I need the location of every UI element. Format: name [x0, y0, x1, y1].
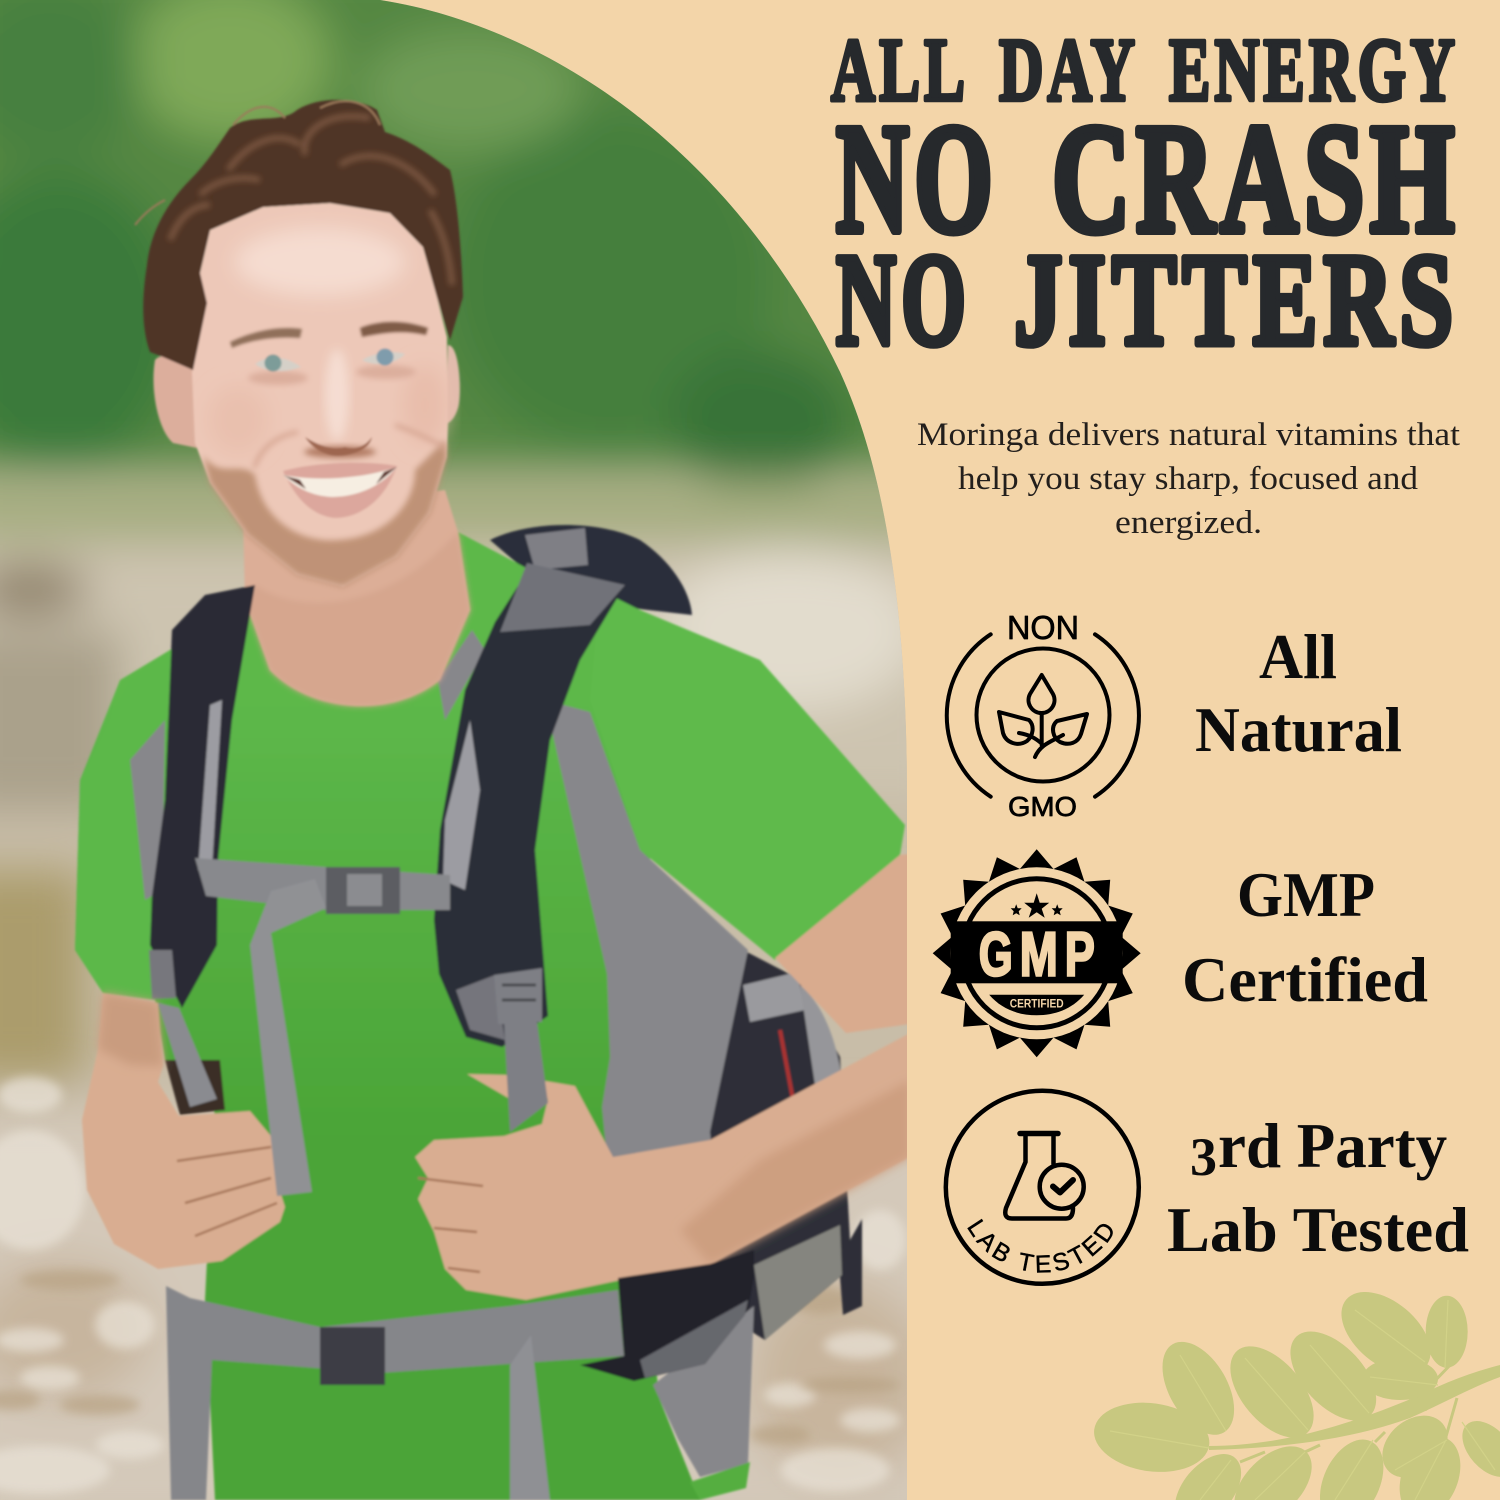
label: all natural: Natural [1195, 695, 1402, 765]
moringa leaf branch [1090, 1276, 1500, 1500]
label: all natural: All [1259, 622, 1337, 692]
right forearm and hand [415, 1033, 910, 1300]
icon: gmp certified: G [979, 920, 1013, 989]
stubble [203, 440, 447, 587]
title line 2 [836, 92, 1460, 265]
label: third party lab tested: rd Party [1218, 1111, 1447, 1181]
label: third party lab tested: 3 [1190, 1127, 1217, 1187]
title line 2: NO [836, 92, 998, 265]
face [192, 203, 448, 587]
title line 1: DAY [999, 21, 1139, 120]
shirt torso [75, 532, 700, 1500]
title line 1 [831, 21, 1459, 120]
label: third party lab tested: Lab Tested [1167, 1195, 1469, 1265]
eye sockets [248, 371, 308, 385]
icon: non gmo [947, 609, 1139, 822]
shirt grey side panels [130, 630, 754, 1477]
title line 3 [836, 226, 1459, 373]
blurred forest and river backdrop [0, 0, 950, 1500]
right upper arm [775, 854, 910, 1033]
icon: lab tested [944, 1088, 1142, 1286]
shirt hem [690, 1462, 750, 1500]
head [135, 100, 463, 587]
label: third party lab tested [1167, 1111, 1469, 1265]
left lower strap [158, 1003, 217, 1107]
neck [243, 490, 470, 706]
chest strap with buckle [195, 858, 450, 1196]
photo: hiker with backpack [0, 0, 950, 1500]
icon: non gmo: GMO [1008, 791, 1077, 822]
left arm and hand [82, 993, 285, 1269]
hair [143, 100, 463, 370]
right shoulder strap [434, 563, 625, 1047]
left shoulder strap [149, 585, 255, 1008]
label: gmp certified: Certified [1182, 945, 1428, 1015]
description text: energized. [1115, 505, 1262, 541]
hip belt [166, 1250, 754, 1500]
backpack top and side pocket [490, 525, 862, 1340]
mouth [283, 463, 397, 518]
label: gmp certified [1182, 860, 1428, 1015]
icon: gmp certified [933, 849, 1141, 1057]
title line 3: NO [836, 226, 971, 373]
right lower strap and buckle [494, 968, 548, 1132]
description text [917, 417, 1460, 541]
nostrils [305, 437, 372, 456]
icon: gmp certified: M [1020, 920, 1058, 989]
ear [154, 356, 197, 448]
icon: non gmo: NON [1007, 609, 1079, 646]
icon: lab tested: LAB TESTED [967, 1218, 1113, 1273]
label: all natural [1195, 622, 1402, 765]
river stones [0, 1077, 906, 1494]
icon: gmp certified: CERTIFIED [1010, 998, 1064, 1010]
shirt sleeve [590, 590, 905, 960]
brows [230, 328, 302, 348]
title [831, 21, 1460, 373]
description text: help you stay sharp, focused and [958, 461, 1419, 497]
eyes [255, 358, 301, 371]
icon: gmp certified: P [1065, 920, 1095, 989]
smile lines [254, 425, 445, 468]
label: gmp certified: GMP [1237, 860, 1375, 930]
title line 1: ALL [831, 21, 969, 120]
description text: Moringa delivers natural vitamins that [917, 417, 1460, 453]
